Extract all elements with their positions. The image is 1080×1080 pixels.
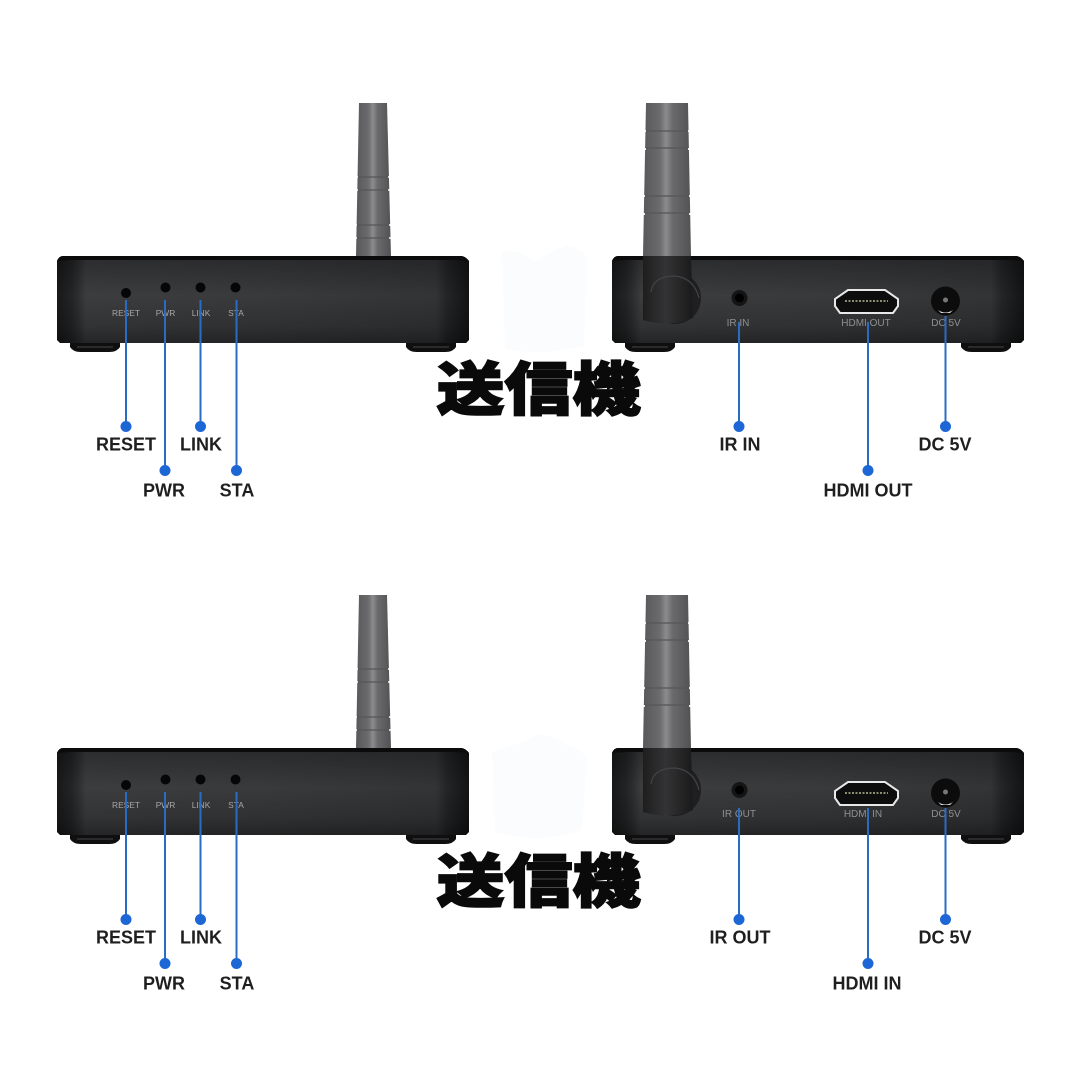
callout labels bbox=[719, 434, 972, 500]
panel printed labels bbox=[112, 308, 244, 318]
callout dots bbox=[120, 421, 242, 476]
IR port bbox=[732, 782, 748, 798]
panel printed labels: RESET bbox=[112, 800, 140, 810]
callout labels: LINK bbox=[180, 434, 222, 454]
panel printed labels: PWR bbox=[156, 308, 175, 318]
panel: lower left device and callouts bbox=[57, 595, 469, 994]
panel printed labels: PWR bbox=[156, 800, 175, 810]
callout labels: RESET bbox=[96, 928, 156, 948]
panel: upper right device and callouts bbox=[612, 103, 1024, 500]
panel printed labels: DC 5V bbox=[931, 809, 961, 820]
HDMI port bbox=[835, 782, 898, 805]
HDMI port bbox=[835, 290, 898, 313]
callout labels: IR OUT bbox=[710, 928, 771, 948]
panel printed labels bbox=[722, 809, 961, 820]
callout lines bbox=[739, 316, 946, 470]
panel printed labels: IR OUT bbox=[722, 809, 756, 820]
device: rear panel bbox=[612, 256, 1024, 352]
panel printed labels bbox=[727, 318, 961, 329]
panel printed labels: HDMI OUT bbox=[841, 318, 891, 329]
ghost mark lower bbox=[492, 735, 587, 838]
panel printed labels bbox=[112, 800, 244, 810]
panel printed labels: IR IN bbox=[727, 318, 749, 329]
panel printed labels: RESET bbox=[112, 308, 140, 318]
icon: right antenna bbox=[643, 103, 701, 324]
panel printed labels: STA bbox=[228, 308, 244, 318]
callout dots bbox=[734, 421, 951, 476]
device: front panel bbox=[57, 256, 469, 352]
callout labels: DC 5V bbox=[918, 928, 972, 948]
callout labels: HDMI OUT bbox=[824, 480, 912, 500]
callout dots bbox=[120, 914, 242, 969]
device: front panel bbox=[57, 748, 469, 844]
device: rear panel bbox=[612, 748, 1024, 844]
DC port bbox=[931, 778, 960, 808]
panel printed labels: STA bbox=[228, 800, 244, 810]
callout labels: LINK bbox=[180, 928, 222, 948]
port holes bbox=[121, 774, 240, 790]
callout lines bbox=[126, 300, 236, 470]
callout labels: STA bbox=[220, 480, 254, 500]
DC port bbox=[931, 286, 960, 316]
port holes bbox=[121, 282, 240, 298]
callout labels bbox=[710, 928, 972, 994]
callout labels: DC 5V bbox=[918, 434, 972, 454]
callout labels: HDMI IN bbox=[832, 974, 902, 994]
callout lines bbox=[739, 808, 946, 963]
panel printed labels: LINK bbox=[192, 308, 211, 318]
callout labels bbox=[96, 928, 254, 994]
callout labels bbox=[96, 434, 254, 500]
callout labels: STA bbox=[220, 974, 254, 994]
ghost mark upper bbox=[502, 246, 587, 352]
callout lines bbox=[126, 792, 236, 963]
panel: lower right device and callouts bbox=[612, 595, 1024, 994]
callout dots bbox=[734, 914, 951, 969]
icon: left antenna bbox=[355, 103, 391, 256]
callout labels: PWR bbox=[143, 974, 185, 994]
callout labels: IR IN bbox=[719, 434, 761, 454]
panel: upper left device and callouts bbox=[57, 103, 469, 500]
panel printed labels: HDMI IN bbox=[844, 809, 882, 820]
IR port bbox=[732, 290, 748, 306]
icon: right antenna bbox=[643, 595, 701, 816]
title upper: 送信機 bbox=[437, 359, 640, 423]
title lower: 送信機 bbox=[437, 851, 640, 915]
panel printed labels: DC 5V bbox=[931, 318, 961, 329]
icon: left antenna bbox=[355, 595, 391, 748]
panel printed labels: LINK bbox=[192, 800, 211, 810]
callout labels: RESET bbox=[96, 434, 156, 454]
callout labels: PWR bbox=[143, 480, 185, 500]
